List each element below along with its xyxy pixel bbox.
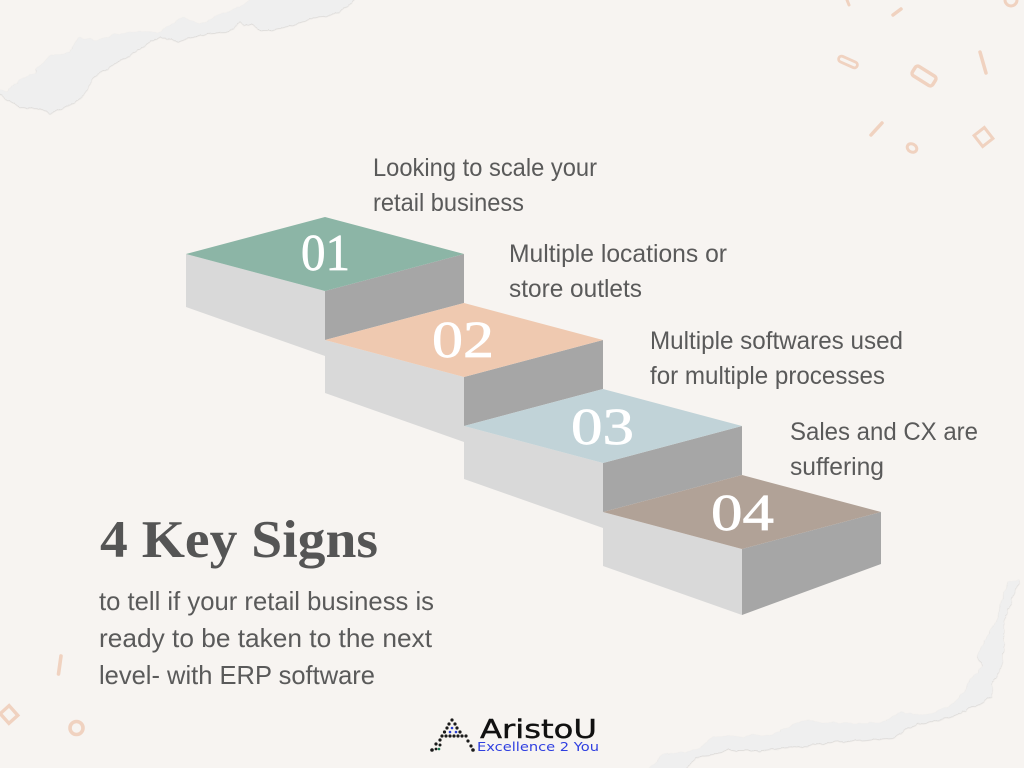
- confetti stroke 3: [980, 52, 986, 73]
- number 01: 01: [301, 225, 350, 282]
- confetti stroke 4: [871, 123, 882, 135]
- confetti stroke 1: [847, 0, 849, 5]
- label: step 4: suffering: [790, 453, 884, 481]
- subheading text: level- with ERP software: [99, 660, 375, 690]
- confetti ring 5: [1005, 0, 1017, 6]
- confetti ring 4: [974, 127, 993, 147]
- staircase: [186, 217, 881, 615]
- label: step 4: [790, 418, 978, 481]
- step 2: [325, 303, 603, 442]
- logo: AristoU: [430, 715, 599, 754]
- confetti ring 3: [906, 142, 918, 154]
- step 3: [464, 389, 742, 528]
- label: step 3: [650, 327, 903, 390]
- label: step 2: store outlets: [509, 275, 642, 303]
- logo tagline: Excellence 2 You: [477, 740, 599, 754]
- torn paper: top left: [0, 0, 357, 113]
- confetti stroke 2: [893, 9, 901, 15]
- logo mark: dotted triangle: [430, 718, 475, 752]
- heading: 4 Key Signs: [100, 511, 378, 569]
- label: step 3: for multiple processes: [650, 362, 885, 390]
- confetti ring 2: [911, 65, 937, 87]
- label: step 1: [373, 154, 597, 217]
- subheading text: ready to be taken to the next: [99, 623, 433, 653]
- subheading text: to tell if your retail business is: [99, 586, 434, 616]
- confetti ring 7: [70, 722, 83, 734]
- logo name: AristoU: [480, 715, 597, 745]
- label: step 3: Multiple softwares used: [650, 327, 903, 355]
- step 1: [186, 217, 464, 356]
- label: step 1: Looking to scale your: [373, 154, 597, 182]
- confetti: top right: [838, 0, 1017, 154]
- label: step 2: Multiple locations or: [509, 240, 727, 268]
- confetti ring 1: [838, 55, 858, 69]
- label: step 1: retail business: [373, 189, 524, 217]
- torn paper: bottom right: [645, 580, 1020, 768]
- number 03: 03: [571, 399, 634, 456]
- step 4: [603, 475, 881, 615]
- number 04: 04: [711, 485, 774, 542]
- confetti: bottom left: [0, 656, 83, 734]
- confetti stroke 5: [58, 656, 61, 674]
- label: step 4: Sales and CX are: [790, 418, 978, 446]
- subheading text: [99, 586, 434, 690]
- confetti ring 6: [0, 706, 18, 723]
- number 02: 02: [432, 312, 494, 369]
- label: step 2: [509, 240, 727, 303]
